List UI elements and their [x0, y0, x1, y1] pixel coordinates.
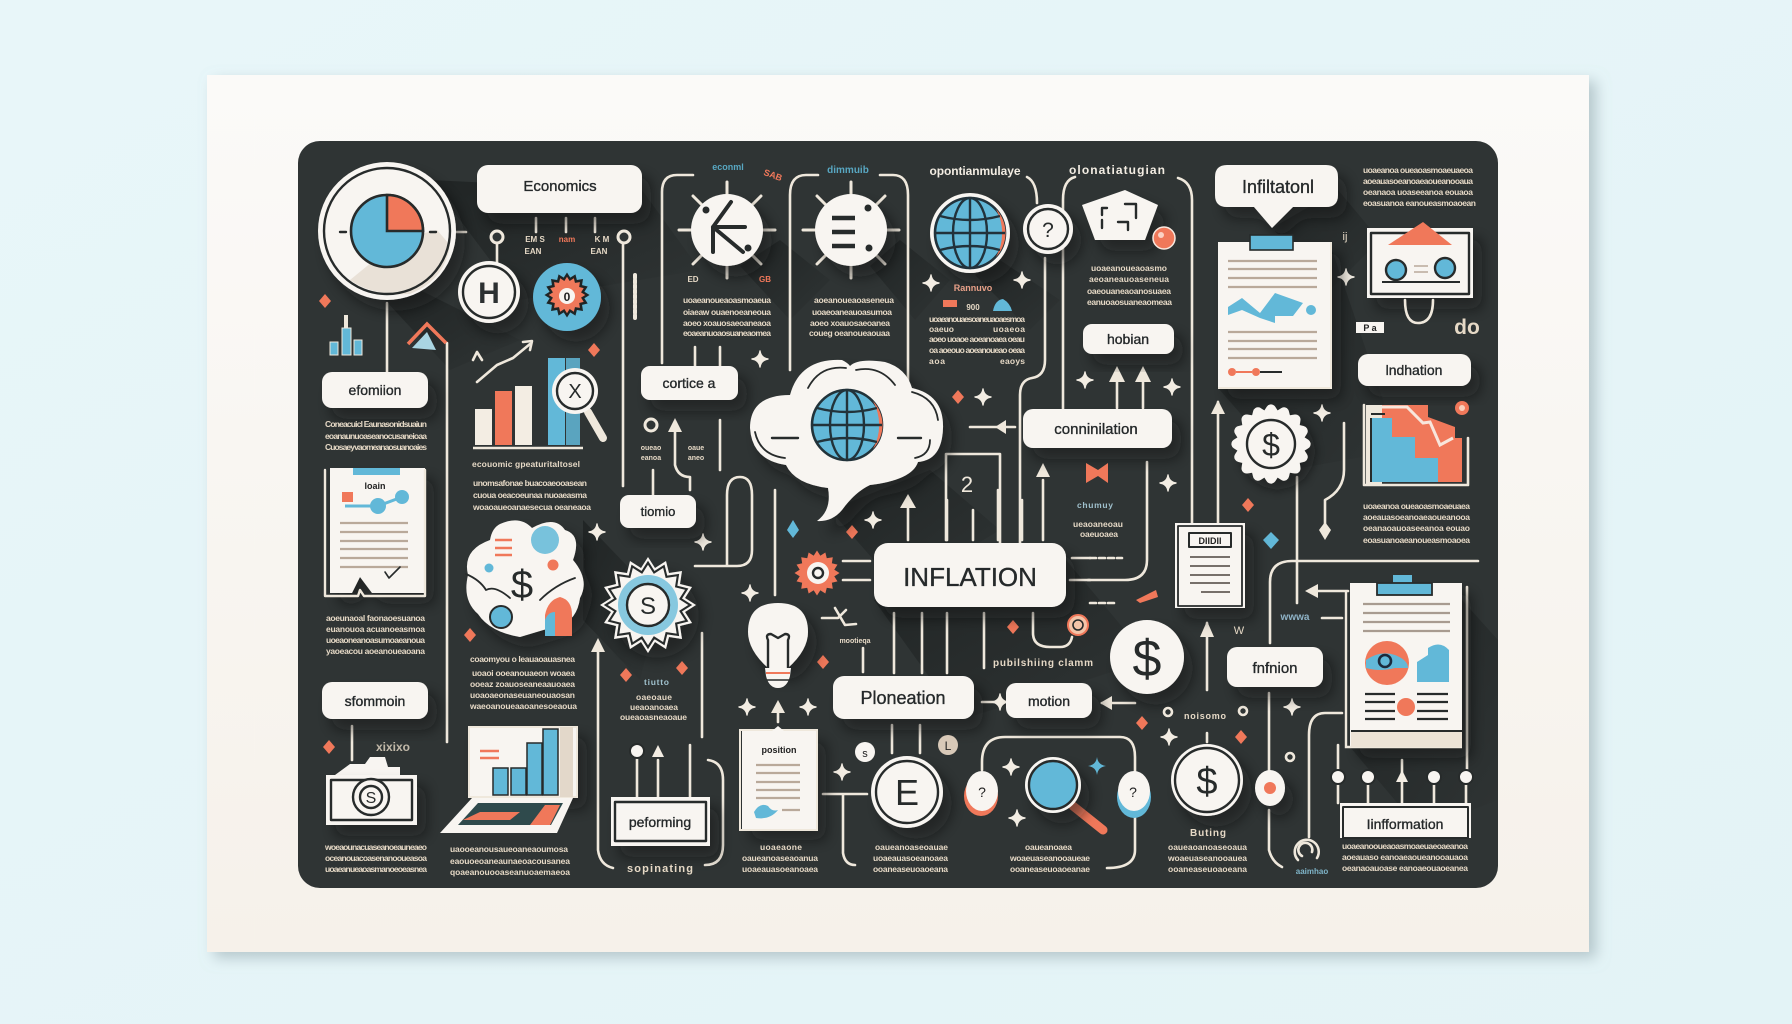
caption: publishing: pubilshiing clamm [993, 658, 1093, 669]
text block: information: oeanaoauoase eanoaeouaoeanea [1342, 863, 1468, 873]
text block: badge: tiutto [644, 677, 669, 687]
icon: question bead left [964, 771, 998, 816]
icon: globe top [930, 193, 1010, 273]
text block: bowtie: ueaoaneoau [1073, 519, 1123, 529]
label: communication [1023, 409, 1172, 448]
icon: document left: loain [364, 481, 386, 491]
label: INFLATION [874, 543, 1066, 607]
label: Economics [477, 165, 642, 213]
small tick labels [525, 235, 610, 256]
text block: globe: uoaeanouaesoaneuaoaesmoa [929, 314, 1025, 324]
label: cortice a: cortice a [663, 375, 716, 391]
misc glitch marks: ij [1343, 231, 1347, 243]
text block: E ring: uoaeauasoeanoaea [873, 853, 948, 863]
text block: badge [620, 677, 687, 722]
text block: document centre [742, 842, 818, 874]
text block: cloud [469, 654, 577, 711]
icon: large dollar coin [1110, 620, 1184, 694]
text block: E gear: aoeo xoauosaeoanea [810, 318, 890, 328]
text block: document left: yaoeacou aoeanoueaoana [326, 646, 425, 656]
label: INFLATION: INFLATION [903, 562, 1037, 592]
icon: magnifier [1025, 757, 1103, 830]
text block: magnifier: woaeuaseanooaueae [1009, 853, 1090, 863]
icon: pie chart circle [318, 162, 456, 300]
text block: step chart [1363, 501, 1470, 545]
top tags K and E: econml [712, 162, 744, 172]
text block: globe: uoaeoa [993, 324, 1025, 334]
icon: laptop chart [440, 727, 577, 833]
text block: document left [326, 613, 425, 656]
text block: K gear: aoeo xoauosaeoaneaoa [683, 318, 771, 328]
top label: pentagon: olonatiatugian [1069, 163, 1165, 177]
accent diamonds left [319, 294, 688, 754]
text block: pentagon: uoaeanoueaoasmo [1091, 263, 1167, 273]
text block: top right: uoaeanoa oueaoasmoaeuaeoa [1363, 165, 1473, 175]
text block: magnifier [1009, 842, 1090, 874]
small node and text under cortice [641, 419, 704, 462]
top tags K and E: ED [687, 275, 699, 284]
icon: spiral with caption: aaimhao [1296, 867, 1328, 876]
text block: bar chart: cuoua oeacoeunaa nuoaeasma [473, 490, 587, 500]
icon: K gear [679, 182, 775, 278]
text block: document centre: uoaeaone [760, 842, 802, 852]
text block: dollar ring [1167, 828, 1247, 874]
text block: E gear: uoaeoaneauoasumoa [812, 307, 892, 317]
icon: money bag box [326, 757, 417, 825]
caption: sopinating: sopinating [627, 863, 693, 875]
connectors under cortice [653, 420, 720, 495]
icon: E gear [803, 182, 899, 278]
text block: step chart: eoasuanoaeanoueasmoaoea [1363, 535, 1470, 545]
icon: question bead right: ? [1129, 784, 1137, 800]
text block: top right [1363, 165, 1476, 208]
squiggle and caption: mootieqa [839, 638, 871, 645]
text block: badge: ueaoanoaea [630, 702, 678, 712]
icon: question bead left: ? [978, 784, 986, 800]
icon: speech label Inflation [1215, 165, 1338, 228]
text block: efornion [325, 419, 427, 452]
trend arrow [473, 341, 532, 382]
small ring nodes [491, 231, 630, 243]
small globe tags: Rannuvo [954, 283, 993, 293]
icon: question bead right [1117, 771, 1151, 818]
icon: speech label Inflation: Infiltatonl [1242, 177, 1314, 197]
text block: laptop: eaouoeoaneaunaeoacousanea [450, 856, 570, 866]
text block: bar chart [472, 459, 591, 512]
bar chart with magnifier: X [568, 381, 582, 403]
icon: E ring [871, 756, 943, 828]
text block: money box: oceanouacoasenanooueasoa [325, 853, 427, 863]
label: fifinion [1227, 647, 1323, 687]
label: hobian: hobian [1107, 331, 1149, 347]
icon: money bag box: S [366, 790, 376, 807]
text block: laptop [450, 844, 570, 877]
small tick labels: EM S [525, 235, 545, 244]
Information box with nodes [1331, 770, 1473, 838]
icon: question circle: ? [1042, 219, 1054, 242]
misc glitch marks: wwwa [1280, 612, 1310, 623]
icon: orange bowtie [1086, 463, 1108, 483]
text block: laptop: uaooeanousaueoaneaoumosa [450, 844, 568, 854]
text block: E ring: oaueanoaseoauae [875, 842, 948, 852]
text block: document left: uoeaoneanoasumoaeanoua [326, 635, 425, 645]
label: tiomio [620, 495, 696, 528]
text block: money box: woeaounacuaseanoeauneaeo [324, 842, 427, 852]
icon: dollar ring [1171, 744, 1243, 816]
text block: bar chart: woaoaueoanaesecua oeaneaoa [472, 502, 591, 512]
label: hobian [1083, 324, 1174, 354]
small tick labels: nam [559, 235, 575, 244]
text block: laptop: qoaeanouooaseanuoaemaeoa [450, 867, 570, 877]
text block: step chart: oeanaoauoaseeanoa eouao [1363, 523, 1470, 533]
text block: E gear: aoeanoueaoaseneua [814, 295, 894, 305]
icon: large dollar coin: $ [1133, 630, 1162, 688]
connector lines [352, 175, 1478, 868]
label: stommoin [322, 682, 428, 719]
icon: document left [325, 468, 425, 596]
white card [207, 75, 1589, 952]
text block: pentagon: eanuoaosuaneaomeaa [1087, 297, 1172, 307]
text block: dollar ring: oaueaoanoaseoaua [1168, 842, 1247, 852]
small tick labels: K M [595, 235, 610, 244]
text block: cloud: waeoanoueaaoanesoeaoua [469, 701, 577, 711]
icon: blue gear circle [533, 263, 601, 331]
icon: pentagon shape [1082, 190, 1158, 240]
label: Ploneation [833, 676, 974, 719]
label: lndhation [1358, 354, 1471, 386]
label: motion: motion [1028, 693, 1070, 709]
text block: step chart: uoaeanoa oueaoasmoaeuaea [1363, 501, 1470, 511]
label: Economics: Economics [523, 178, 597, 195]
small tick labels: EAN [591, 247, 608, 256]
icon: cloud with dollar [466, 520, 584, 637]
text block: E ring: ooaneaseuoaoeana [873, 864, 948, 874]
colour diamonds centre [787, 390, 1279, 775]
text block: information [1342, 841, 1468, 873]
icon: dollar gear: $ [1262, 427, 1280, 463]
label: stommoin: sfommoin [345, 693, 405, 709]
text block: cloud: ooeaz zoauoseaneaauoaea [470, 679, 575, 689]
text block: pentagon: oaeouaneaoanosuaea [1087, 286, 1171, 296]
icon: report bottom right [1346, 575, 1462, 747]
icon: report top [1218, 235, 1332, 388]
top tags K and E [687, 162, 869, 284]
orange coin [1068, 615, 1088, 635]
top tags K and E: dimmuib [827, 165, 869, 176]
label: communication: conninilation [1054, 421, 1138, 438]
icon: small bars [330, 315, 362, 355]
icon: roof [408, 324, 446, 350]
icon: small document [1175, 523, 1245, 608]
icon: E ring: E [895, 772, 919, 813]
text block: globe [929, 314, 1025, 366]
small tag and do label: P a [1363, 323, 1378, 333]
performing box with nodes: peforming [629, 814, 691, 830]
top tags K and E: SAB [762, 167, 784, 183]
text block: badge: oueaoasneaoaue [620, 712, 687, 722]
misc glitch marks [1136, 231, 1347, 637]
text block: bar chart: unomsafonae buacoaeooasean [473, 478, 587, 488]
label: cortice a [641, 366, 738, 400]
text block: information: aoeauaso eanoaeaoueanooauaoa [1342, 852, 1468, 862]
text block: efornion: eoanaunuoaseanocusaneioaa [325, 431, 427, 441]
text block: money box [324, 842, 427, 874]
label: motion [1006, 683, 1092, 718]
icon: H circle [458, 261, 520, 323]
small tag and do label: do [1454, 316, 1480, 339]
performing box with nodes [611, 744, 710, 846]
text block: bowtie: chumuy [1077, 500, 1113, 510]
small badges [855, 735, 958, 762]
text block: magnifier: oaueanoaea [1025, 842, 1072, 852]
text block: top right: eoasuanoa eanoueasmoaoean [1363, 198, 1476, 208]
icon: step chart [1364, 401, 1469, 485]
text block: efornion: Cuosaeyvaomeanaosuanoaies [325, 442, 427, 452]
text block: document centre: oaueanoaseaoanua [742, 853, 818, 863]
Information box with nodes: Iinfformation [1367, 816, 1443, 832]
text block: efornion: Coneacuicl Eaunasonidsuaiun [325, 419, 427, 429]
text block: document left: aoeunaoal faonaoesuanoa [326, 613, 425, 623]
label: efornion [322, 372, 428, 408]
small tag and do label [1356, 316, 1480, 339]
icon: cloud with dollar: $ [511, 563, 533, 607]
text block: top right: oeanaoa uoaseeanoa eouaoa [1363, 187, 1473, 197]
icon: question circle [1023, 204, 1073, 254]
text block: magnifier: ooaneaseuoaoeanae [1010, 864, 1090, 874]
text block: bowtie: oaeuoaea [1080, 529, 1118, 539]
text block: bowtie [1073, 500, 1123, 539]
top tags K and E: GB [759, 275, 771, 284]
icon: house machine [1367, 222, 1473, 323]
orange ball [1153, 227, 1175, 249]
text block: K gear: uoaeanoueaoasmoaeua [683, 295, 771, 305]
arrowheads [591, 366, 1331, 713]
text block: bar chart: ecouomic gpeaturitaltosel [472, 459, 580, 469]
text block: badge: oaeoaue [636, 692, 672, 702]
small tick labels: EAN [525, 247, 542, 256]
plus markers [589, 269, 1354, 826]
small caption row [1164, 707, 1294, 761]
icon: speech cloud with globe [750, 360, 943, 521]
text block: globe: oaeuo [929, 324, 954, 334]
top label: globe: opontianmulaye [930, 164, 1021, 178]
icon: document centre bottom [740, 726, 817, 830]
small globe tags [943, 283, 1012, 312]
small node and text under cortice: oaue [688, 445, 704, 452]
text block: top right: aoeauasoeanoaeaoueanooaua [1363, 176, 1473, 186]
text block: dollar ring: Buting [1190, 828, 1226, 839]
small node and text under cortice: aneo [688, 455, 704, 462]
text block: cloud: uoaoaeonaseuaneouaosan [470, 690, 575, 700]
text block: cloud: coaomyou o leauaoauasnea [470, 654, 575, 664]
small globe tags: 900 [966, 303, 980, 312]
text block: step chart: aoeauasoeanoaeaoueanooa [1363, 512, 1470, 522]
small node and text under cortice: oueao [641, 445, 661, 452]
misc glitch marks: W [1234, 625, 1245, 637]
icon: H circle: H [478, 277, 500, 310]
icon: document centre bottom: position [762, 745, 796, 755]
text block: document left: euanouoa acuanoeasmoa [326, 624, 425, 634]
icon: lightbulb [748, 603, 808, 688]
text block: cloud: uoaoi ooeanouaeon woaea [472, 668, 575, 678]
text block: globe: aoeo uoaoe aoeanoaea oeau [929, 334, 1025, 344]
text block: pentagon: aeoaneauoaseneua [1089, 274, 1169, 284]
small badges: s [862, 748, 868, 760]
small caption row: noisomo [1184, 711, 1226, 721]
small node and text under cortice: eanoa [641, 455, 661, 462]
text block: money box: uoaeanueaoasmanoeoeasnea [325, 864, 427, 874]
icon: starburst dollar badge: S [640, 593, 656, 620]
label: fifinion: fnfnion [1252, 660, 1298, 677]
squiggle and caption [822, 608, 871, 645]
small squiggle label: xixixo [376, 740, 410, 754]
label: lndhation: lndhation [1386, 362, 1442, 378]
icon: blue gear circle: 0 [564, 290, 571, 304]
icon: small document: DIIDII [1198, 536, 1222, 546]
text block: E gear [809, 295, 894, 338]
text block: K gear: eoaeanuoaosuaneaomea [683, 328, 771, 338]
label: efornion: efomiion [349, 382, 401, 398]
text block: K gear: oiaeaw ouaenoeaneoua [683, 307, 771, 317]
text block: globe: oa aoeouo aoeanoueao oeaa [929, 345, 1025, 355]
icon: orange gear [797, 553, 837, 593]
icon: dollar gear [1236, 409, 1306, 479]
text block: E gear: coueg oeanoueaouaa [809, 328, 890, 338]
icon: dollar ring: $ [1196, 761, 1218, 803]
dark panel [298, 141, 1498, 888]
icon: spiral with caption [1295, 840, 1328, 876]
text block: dollar ring: ooaneaseuoaoeana [1168, 864, 1247, 874]
icon: orange bead [1255, 770, 1285, 806]
text block: globe: eaoys [1000, 356, 1025, 366]
label: tiomio: tiomio [641, 504, 675, 519]
box label 2: 2 [961, 472, 973, 497]
text block: E ring [873, 842, 948, 874]
label: Ploneation: Ploneation [860, 688, 946, 708]
text block: K gear [683, 295, 771, 338]
text block: information: uoaeanooueaoasmoaeuaeoaeanoa [1342, 841, 1468, 851]
icon: starburst dollar badge [600, 557, 696, 653]
small badges: L [945, 739, 952, 753]
text block: pentagon [1087, 263, 1172, 307]
bar chart with magnifier [473, 358, 603, 448]
text block: dollar ring: woaeuaseanooauea [1167, 853, 1247, 863]
text block: document centre: uoaeauasoeanoaea [742, 864, 818, 874]
text block: globe: aoa [929, 356, 945, 366]
